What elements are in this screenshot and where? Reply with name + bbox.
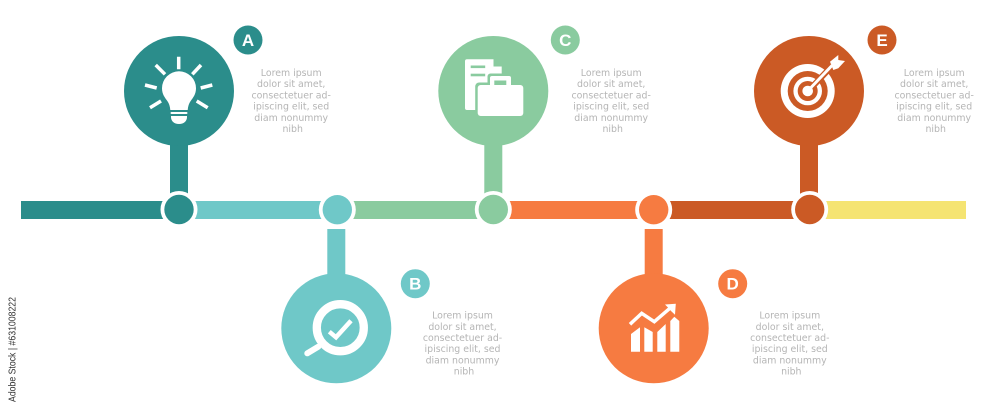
- badge E: [868, 26, 896, 54]
- text block A: Lorem ipsum: [261, 68, 322, 79]
- text block C: consectetuer ad-: [572, 90, 651, 101]
- icon: rising bar chart: [630, 304, 679, 352]
- badge B: B: [409, 275, 421, 294]
- text block B: consectetuer ad-: [423, 333, 502, 344]
- icon: document and briefcase: [465, 59, 526, 118]
- timeline bar: [21, 201, 966, 219]
- step C: pin: [438, 36, 548, 228]
- text block B: ipiscing elit, sed: [425, 344, 500, 355]
- text block B: dolor sit amet,: [428, 322, 497, 333]
- text block D: consectetuer ad-: [750, 333, 830, 344]
- icon: magnifier with check: [307, 304, 364, 353]
- icon: light bulb: [145, 57, 212, 124]
- badge A: [234, 26, 262, 54]
- text block C: diam nonummy: [574, 113, 649, 124]
- text block B: Lorem ipsum: [432, 311, 493, 322]
- badge A: A: [242, 31, 254, 50]
- step A: pin: [124, 36, 234, 228]
- text block B: diam nonummy: [426, 355, 500, 366]
- text block C: Lorem ipsum: [581, 68, 642, 79]
- text block E: ipiscing elit, sed: [896, 102, 972, 113]
- text block D: diam nonummy: [753, 355, 827, 366]
- text block A: nibh: [282, 124, 303, 135]
- badge D: D: [727, 275, 739, 294]
- step B: pin: [281, 191, 391, 383]
- badge B: [401, 269, 430, 298]
- text block E: Lorem ipsum: [904, 68, 965, 79]
- text block E: diam nonummy: [897, 113, 972, 124]
- badge D: [718, 269, 747, 298]
- icon: target with arrow: [781, 55, 845, 118]
- text block E: dolor sit amet,: [900, 79, 968, 90]
- text block D: dolor sit amet,: [756, 322, 824, 333]
- text block D: nibh: [781, 367, 802, 378]
- side credit text: Adobe Stock | #631008222: [8, 297, 18, 402]
- badge C: C: [559, 31, 571, 50]
- text block D: Lorem ipsum: [759, 311, 820, 322]
- text block C: dolor sit amet,: [577, 79, 645, 90]
- text block D: ipiscing elit, sed: [752, 344, 828, 355]
- text block C: nibh: [602, 124, 623, 135]
- step E: pin: [754, 36, 864, 228]
- text block B: nibh: [454, 367, 474, 378]
- text block A: consectetuer ad-: [252, 90, 331, 101]
- badge E: E: [876, 31, 888, 50]
- badge C: [551, 26, 580, 54]
- text block A: ipiscing elit, sed: [253, 102, 329, 113]
- text block E: consectetuer ad-: [895, 90, 974, 101]
- text block A: diam nonummy: [254, 113, 329, 124]
- text block E: nibh: [925, 124, 946, 135]
- step D: pin: [599, 191, 709, 383]
- text block C: ipiscing elit, sed: [573, 102, 649, 113]
- text block A: dolor sit amet,: [257, 79, 325, 90]
